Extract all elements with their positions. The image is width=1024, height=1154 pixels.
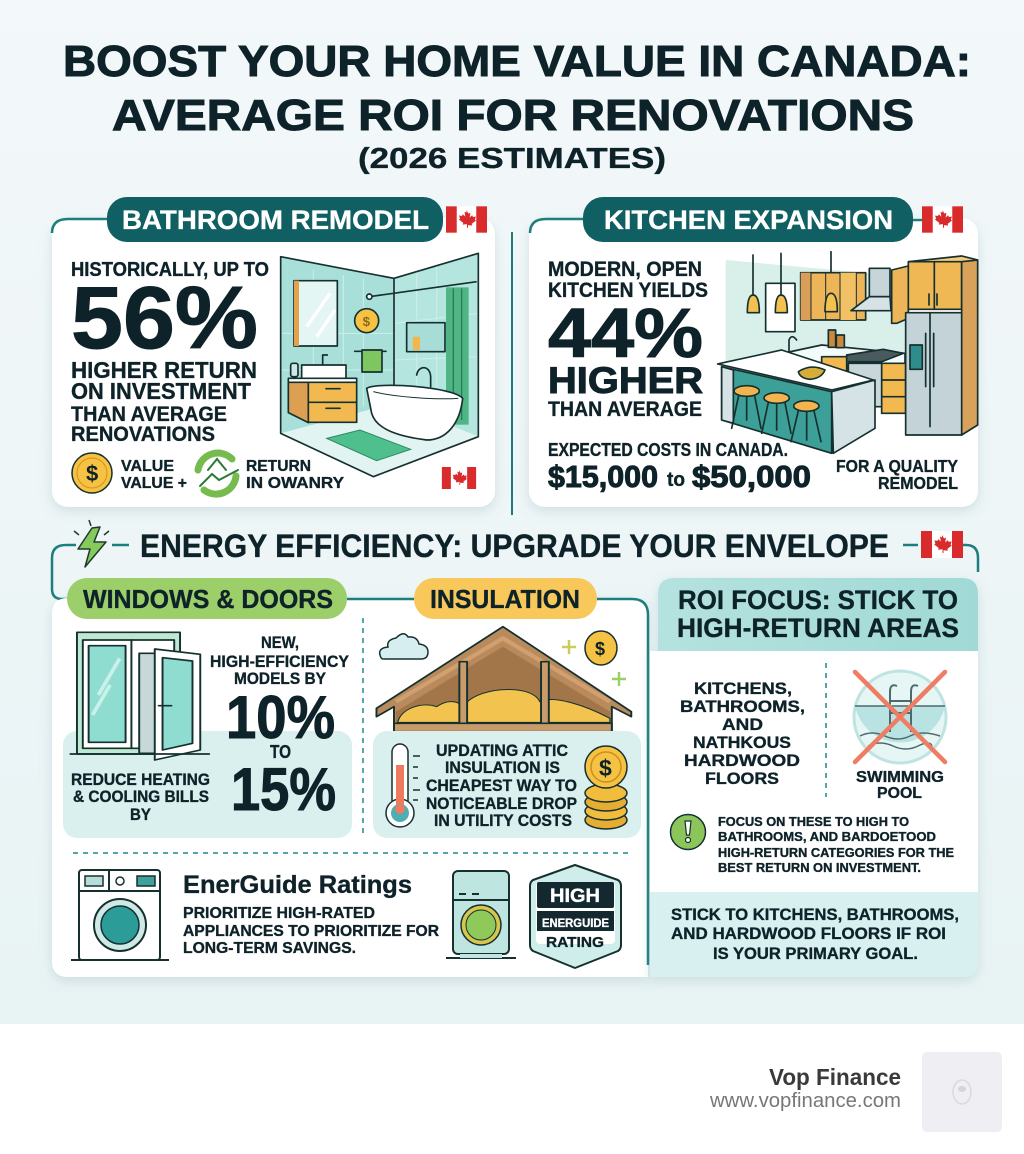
panel: roi focus: [650, 578, 978, 977]
title: AVERAGE ROI FOR RENOVATIONS: [112, 91, 914, 140]
callout: primary goal: IS YOUR PRIMARY GOAL.: [713, 944, 918, 963]
text: kitchen statistic: MODERN, OPEN: [548, 258, 702, 281]
text: energuide ratings: EnerGuide Ratings: [183, 871, 412, 899]
text: high-efficiency models: 10%: [226, 684, 335, 751]
title: [63, 37, 971, 175]
illustration: bathroom: $: [363, 314, 371, 329]
icon: canadian flag: [922, 206, 963, 233]
icon: canadian flag small: [442, 467, 476, 489]
text: high-return areas list: KITCHENS,: [694, 679, 792, 698]
heading: windows and doors: [67, 578, 347, 619]
icon: appliance: [446, 871, 516, 958]
text: return: RETURN: [246, 458, 311, 475]
heading: roi focus: [658, 578, 978, 651]
text: high-return areas list: FLOORS: [705, 769, 779, 788]
text: quality remodel: [836, 456, 958, 493]
heading: insulation: INSULATION: [430, 584, 580, 614]
text: attic insulation: INSULATION IS: [445, 758, 560, 777]
section heading: energy efficiency: [52, 520, 978, 599]
text: attic insulation: [426, 741, 577, 830]
text: kitchen statistic: KITCHEN YIELDS: [548, 279, 708, 302]
callout: primary goal: STICK TO KITCHENS, BATHROOMS,: [671, 905, 959, 924]
text: high-return areas list: [680, 679, 805, 788]
text: high-return areas list: AND: [722, 715, 763, 734]
footer: [0, 1024, 1024, 1154]
text: bathroom statistic: HIGHER RETURN: [71, 357, 257, 383]
text: high-return areas list: BATHROOMS,: [680, 697, 805, 716]
text: swimming pool: SWIMMING: [856, 769, 944, 786]
icon: canadian flag: [446, 206, 487, 233]
text: attic insulation: IN UTILITY COSTS: [434, 811, 572, 830]
icon: dollar coin: [72, 453, 112, 493]
title: BOOST YOUR HOME VALUE IN CANADA:: [63, 37, 971, 86]
callout: primary goal: AND HARDWOOD FLOORS IF ROI: [671, 924, 946, 943]
text: high-return areas list: HARDWOOD: [684, 751, 800, 770]
icon: lightning bolt: [74, 520, 109, 567]
text: reduce heating and cooling: & COOLING BILLS: [73, 787, 209, 806]
icon: canadian flag: [921, 531, 963, 558]
text: kitchen statistic: [548, 258, 708, 421]
heading: roi focus: HIGH-RETURN AREAS: [677, 613, 959, 643]
text: high-return areas list: NATHKOUS: [693, 733, 791, 752]
heading: windows and doors: WINDOWS & DOORS: [83, 584, 333, 614]
text: swimming pool: POOL: [877, 785, 922, 802]
text: kitchen statistic: THAN AVERAGE: [548, 398, 702, 421]
text: high-efficiency models: NEW,: [261, 633, 299, 652]
text: quality remodel: REMODEL: [878, 473, 958, 493]
text: expected costs: $15,000: [548, 459, 658, 494]
text: high-efficiency models: TO: [270, 742, 291, 762]
text: value: VALUE: [121, 458, 174, 475]
icon: crossed-out swimming pool: [854, 671, 946, 763]
text: bathroom statistic: ON INVESTMENT: [71, 378, 251, 404]
text: value: VALUE +: [121, 475, 187, 492]
text: high-efficiency models: MODELS BY: [234, 669, 327, 688]
icon: thermometer: [386, 744, 420, 827]
text: focus note: FOCUS ON THESE TO HIGH TO: [718, 815, 909, 829]
badge: high energuide rating: HIGH: [550, 886, 600, 907]
text: return: IN OWANRY: [246, 475, 344, 492]
text: energuide ratings: [183, 871, 439, 957]
text: reduce heating and cooling: [71, 770, 210, 824]
icon: coin stack: [585, 746, 627, 829]
text: bathroom statistic: THAN AVERAGE: [71, 403, 227, 426]
text: focus note: [718, 815, 954, 875]
text: energuide ratings: PRIORITIZE HIGH-RATED: [183, 905, 375, 922]
illustration: window and door: [70, 632, 209, 760]
icon: dollar coin: $: [86, 461, 98, 486]
panel: kitchen expansion: [529, 197, 978, 507]
heading: bathroom remodel: [107, 197, 443, 242]
text: attic insulation: CHEAPEST WAY TO: [426, 776, 577, 795]
badge: high energuide rating: RATING: [546, 934, 604, 951]
icon: washing machine: [71, 870, 169, 960]
heading: roi focus: ROI FOCUS: STICK TO: [678, 585, 958, 615]
text: reduce heating and cooling: REDUCE HEATING: [71, 770, 210, 789]
icon: cloud: [380, 634, 428, 659]
connector lines: [347, 599, 648, 965]
text: value: [121, 458, 187, 492]
text: brand: [709, 1064, 901, 1112]
icon: coin and plus signs: [562, 631, 626, 686]
heading: kitchen expansion: KITCHEN EXPANSION: [604, 205, 893, 235]
text: focus note: BEST RETURN ON INVESTMENT.: [718, 861, 921, 875]
panel: bathroom remodel: [52, 197, 495, 507]
panel: windows, insulation and energuide: [52, 578, 648, 977]
text: high-efficiency models: HIGH-EFFICIENCY: [210, 652, 350, 671]
text: expected costs: to: [667, 469, 685, 491]
illustration: bathroom: [281, 253, 478, 477]
heading: kitchen expansion: [583, 197, 913, 242]
text: brand: www.vopfinance.com: [709, 1090, 901, 1112]
text: expected costs: $50,000: [692, 459, 811, 494]
icon: coin and plus signs: $: [595, 639, 605, 659]
text: energuide ratings: APPLIANCES TO PRIORITIZE FOR: [183, 923, 439, 940]
text: focus note: HIGH-RETURN CATEGORIES FOR THE: [718, 846, 954, 860]
icon: coin stack: $: [599, 755, 612, 781]
text: quality remodel: FOR A QUALITY: [836, 456, 958, 476]
badge: high energuide rating: [530, 865, 621, 968]
text: swimming pool: [856, 769, 944, 802]
text: kitchen statistic: HIGHER: [548, 360, 703, 401]
section heading: energy efficiency: ENERGY EFFICIENCY: UPGRADE YOUR ENVELOPE: [140, 528, 889, 564]
icon: exclamation: [670, 814, 706, 850]
text: high-efficiency models: [210, 633, 350, 823]
text: reduce heating and cooling: BY: [130, 805, 152, 824]
text: expected costs: EXPECTED COSTS IN CANADA.: [548, 440, 788, 460]
logo placeholder: [922, 1052, 1002, 1132]
heading: insulation: [414, 578, 597, 619]
illustration: attic insulation: [376, 627, 631, 732]
card: heating and cooling savings: [63, 731, 352, 838]
text: kitchen statistic: 44%: [548, 294, 703, 372]
text: expected costs: [548, 440, 811, 494]
text: attic insulation: NOTICEABLE DROP: [426, 794, 577, 813]
text: attic insulation: UPDATING ATTIC: [436, 741, 568, 760]
text: energuide ratings: LONG-TERM SAVINGS.: [183, 940, 356, 957]
text: brand: Vop Finance: [769, 1064, 901, 1090]
text: high-efficiency models: 15%: [231, 756, 336, 823]
card: attic insulation: [373, 731, 641, 838]
heading: bathroom remodel: BATHROOM REMODEL: [122, 205, 429, 235]
text: focus note: BATHROOMS, AND BARDOETOOD: [718, 830, 936, 844]
text: bathroom statistic: [71, 259, 269, 446]
text: bathroom statistic: HISTORICALLY, UP TO: [71, 259, 269, 281]
text: return: [246, 458, 344, 492]
badge: high energuide rating: ENERGUIDE: [542, 916, 609, 930]
divider between top cards: [511, 232, 513, 515]
callout: primary goal: [650, 892, 978, 977]
text: bathroom statistic: 56%: [71, 268, 258, 367]
title: (2026 ESTIMATES): [358, 143, 666, 175]
icon: return arrows: [198, 453, 238, 494]
illustration: kitchen: [718, 252, 978, 453]
text: bathroom statistic: RENOVATIONS: [71, 423, 215, 446]
